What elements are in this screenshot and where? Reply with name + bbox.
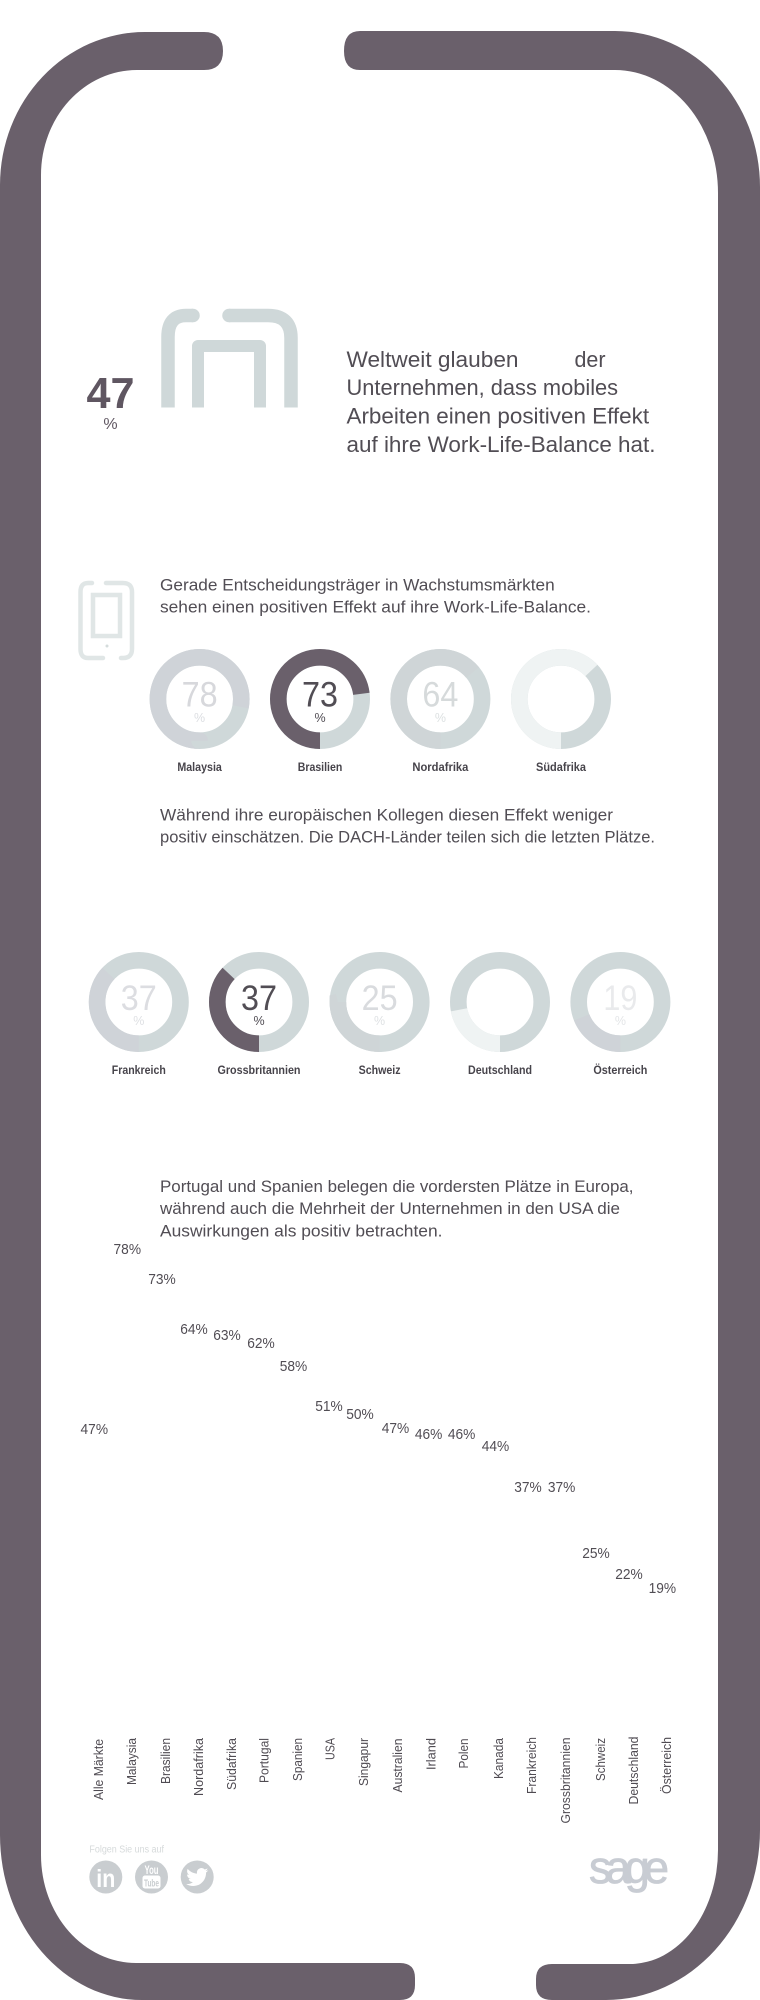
text: European colleagues: Während ihre europäischen Kollegen diesen Effekt weniger bbox=[160, 806, 613, 825]
chart axis: market labels: Nordafrika bbox=[192, 1738, 206, 1796]
donut: Schweiz 25: Schweiz bbox=[359, 1065, 401, 1077]
donut: Frankreich 37: % bbox=[133, 1014, 144, 1028]
donut: Nordafrika 64: 64 bbox=[422, 676, 458, 715]
chart: percentage values by market: 62% bbox=[247, 1335, 275, 1352]
chart axis: market labels: Spanien bbox=[291, 1738, 305, 1781]
chart: percentage values by market: 58% bbox=[280, 1358, 307, 1375]
chart axis: market labels: Südafrika bbox=[225, 1738, 239, 1790]
donut: Brasilien 73: 73 bbox=[302, 676, 338, 715]
headline statistic: 47 percent: 47 bbox=[86, 369, 134, 418]
chart axis: market labels: Polen bbox=[457, 1738, 471, 1768]
donut: Malaysia 78 bbox=[158, 657, 241, 774]
chart axis: market labels bbox=[92, 1736, 674, 1824]
donut: Grossbritannien 37: Grossbritannien bbox=[218, 1065, 300, 1077]
donut: Malaysia 78: Malaysia bbox=[177, 762, 222, 774]
chart axis: market labels: Singapur bbox=[357, 1738, 371, 1786]
chart axis: market labels: Alle Märkte bbox=[92, 1739, 106, 1800]
chart axis: market labels: Österreich bbox=[660, 1737, 674, 1794]
chart axis: market labels: Schweiz bbox=[594, 1738, 608, 1781]
donut: Grossbritannien 37: 37 bbox=[241, 979, 277, 1018]
donut: Nordafrika 64: Nordafrika bbox=[412, 762, 469, 774]
text: Portugal and Spain bbox=[159, 1177, 634, 1241]
donut: Grossbritannien 37: % bbox=[253, 1014, 265, 1028]
chart: percentage values by market: 78% bbox=[114, 1241, 141, 1258]
chart: percentage values by market: 22% bbox=[615, 1566, 643, 1583]
intro text: auf ihre Work-Life-Balance hat. bbox=[346, 432, 656, 457]
icon: smartphone bbox=[80, 583, 132, 658]
donut: Nordafrika 64 bbox=[399, 657, 482, 774]
donut: Malaysia 78: 78 bbox=[182, 676, 218, 715]
intro text: Unternehmen, dass mobiles bbox=[346, 375, 618, 400]
donut: Frankreich 37 bbox=[97, 960, 181, 1077]
donut: Frankreich 37: 37 bbox=[121, 979, 157, 1018]
chart: percentage values by market: 73% bbox=[148, 1271, 176, 1288]
donut: Brasilien 73 bbox=[278, 657, 362, 774]
donut: Grossbritannien 37 bbox=[217, 960, 301, 1077]
icon: LinkedIn bbox=[89, 1860, 122, 1894]
chart axis: market labels: Brasilien bbox=[159, 1738, 173, 1784]
chart axis: market labels: Portugal bbox=[258, 1738, 272, 1783]
icon: YouTube: You bbox=[144, 1863, 158, 1877]
donut: Brasilien 73: Brasilien bbox=[298, 762, 342, 774]
chart: percentage values by market: 19% bbox=[649, 1580, 676, 1597]
logo: sage: sage bbox=[589, 1842, 669, 1893]
chart axis: market labels: Australien bbox=[391, 1738, 405, 1792]
donut: Deutschland 22: Deutschland bbox=[468, 1065, 532, 1077]
donut: Nordafrika 64: % bbox=[435, 711, 446, 725]
icon: YouTube bbox=[135, 1860, 168, 1894]
icon: mobile doorway bbox=[168, 309, 291, 408]
donut: Österreich 19: 19 bbox=[603, 979, 637, 1018]
donut: Frankreich 37: Frankreich bbox=[112, 1065, 166, 1077]
chart axis: market labels: Kanada bbox=[492, 1738, 506, 1779]
chart: percentage values by market: 64% bbox=[180, 1321, 208, 1338]
chart axis: market labels: Frankreich bbox=[525, 1737, 539, 1794]
frame: right bracket bbox=[344, 31, 760, 2000]
text: Portugal and Spain: Auswirkungen als positiv betrachten. bbox=[160, 1222, 442, 1241]
headline statistic: 47 percent: % bbox=[103, 416, 118, 433]
chart: percentage values by market: 63% bbox=[213, 1327, 241, 1344]
frame: left bracket bbox=[0, 32, 415, 2000]
donut: Schweiz 25: % bbox=[374, 1014, 385, 1028]
intro text bbox=[346, 347, 656, 457]
chart axis: market labels: Irland bbox=[424, 1738, 438, 1770]
chart axis: market labels: USA bbox=[324, 1737, 338, 1760]
intro text: Weltweit glauben bbox=[346, 347, 518, 372]
icon: LinkedIn: in bbox=[96, 1865, 115, 1893]
donut: Südafrika 63: Südafrika bbox=[536, 762, 587, 774]
text: growth markets bbox=[160, 576, 591, 617]
donut: Schweiz 25 bbox=[338, 960, 421, 1077]
chart: percentage values by market: 37% bbox=[514, 1479, 542, 1496]
chart: percentage values by market: 44% bbox=[482, 1438, 509, 1455]
text: growth markets: sehen einen positiven Effekt auf ihre Work-Life-Balance. bbox=[160, 598, 591, 617]
text: European colleagues bbox=[160, 806, 655, 847]
chart: percentage values by market: 47% bbox=[81, 1421, 108, 1438]
donut: Österreich 19: % bbox=[615, 1014, 626, 1028]
text: growth markets: Gerade Entscheidungsträger in Wachstumsmärkten bbox=[160, 576, 555, 595]
text: Portugal and Spain: während auch die Mehrheit der Unternehmen in den USA die bbox=[159, 1199, 620, 1218]
chart: percentage values by market: 47% bbox=[382, 1420, 409, 1437]
donut: Österreich 19 bbox=[579, 960, 662, 1077]
icon: YouTube: Tube bbox=[144, 1878, 159, 1890]
donut: Brasilien 73: % bbox=[314, 711, 326, 725]
chart axis: market labels: Malaysia bbox=[125, 1738, 139, 1785]
chart: percentage values by market: 51% bbox=[315, 1398, 343, 1415]
donut: Schweiz 25: 25 bbox=[362, 979, 398, 1018]
chart: percentage values by market: 46% bbox=[415, 1426, 442, 1443]
donut: Südafrika 63 bbox=[519, 657, 603, 774]
chart: percentage values by market: 37% bbox=[548, 1479, 575, 1496]
donut: Deutschland 22 bbox=[458, 960, 542, 1077]
chart: percentage values by market: 46% bbox=[448, 1426, 475, 1443]
donut: Malaysia 78: % bbox=[194, 711, 205, 725]
chart: percentage values by market bbox=[81, 1241, 676, 1597]
intro text: der bbox=[574, 347, 606, 372]
intro text: Arbeiten einen positiven Effekt bbox=[346, 404, 649, 428]
chart: percentage values by market: 25% bbox=[582, 1545, 610, 1562]
icon: Twitter bbox=[181, 1860, 214, 1894]
chart: percentage values by market: 50% bbox=[346, 1406, 374, 1423]
social heading: Folgen Sie uns auf bbox=[89, 1845, 164, 1856]
text: European colleagues: positiv einschätzen. Die DACH-Länder teilen sich die letzten Plätze. bbox=[160, 828, 655, 847]
chart axis: market labels: Deutschland bbox=[627, 1736, 641, 1804]
text: Portugal and Spain: Portugal und Spanien belegen die vordersten Plätze in Europa, bbox=[160, 1177, 634, 1196]
donut: Österreich 19: Österreich bbox=[593, 1064, 647, 1077]
chart axis: market labels: Grossbritannien bbox=[559, 1737, 573, 1824]
